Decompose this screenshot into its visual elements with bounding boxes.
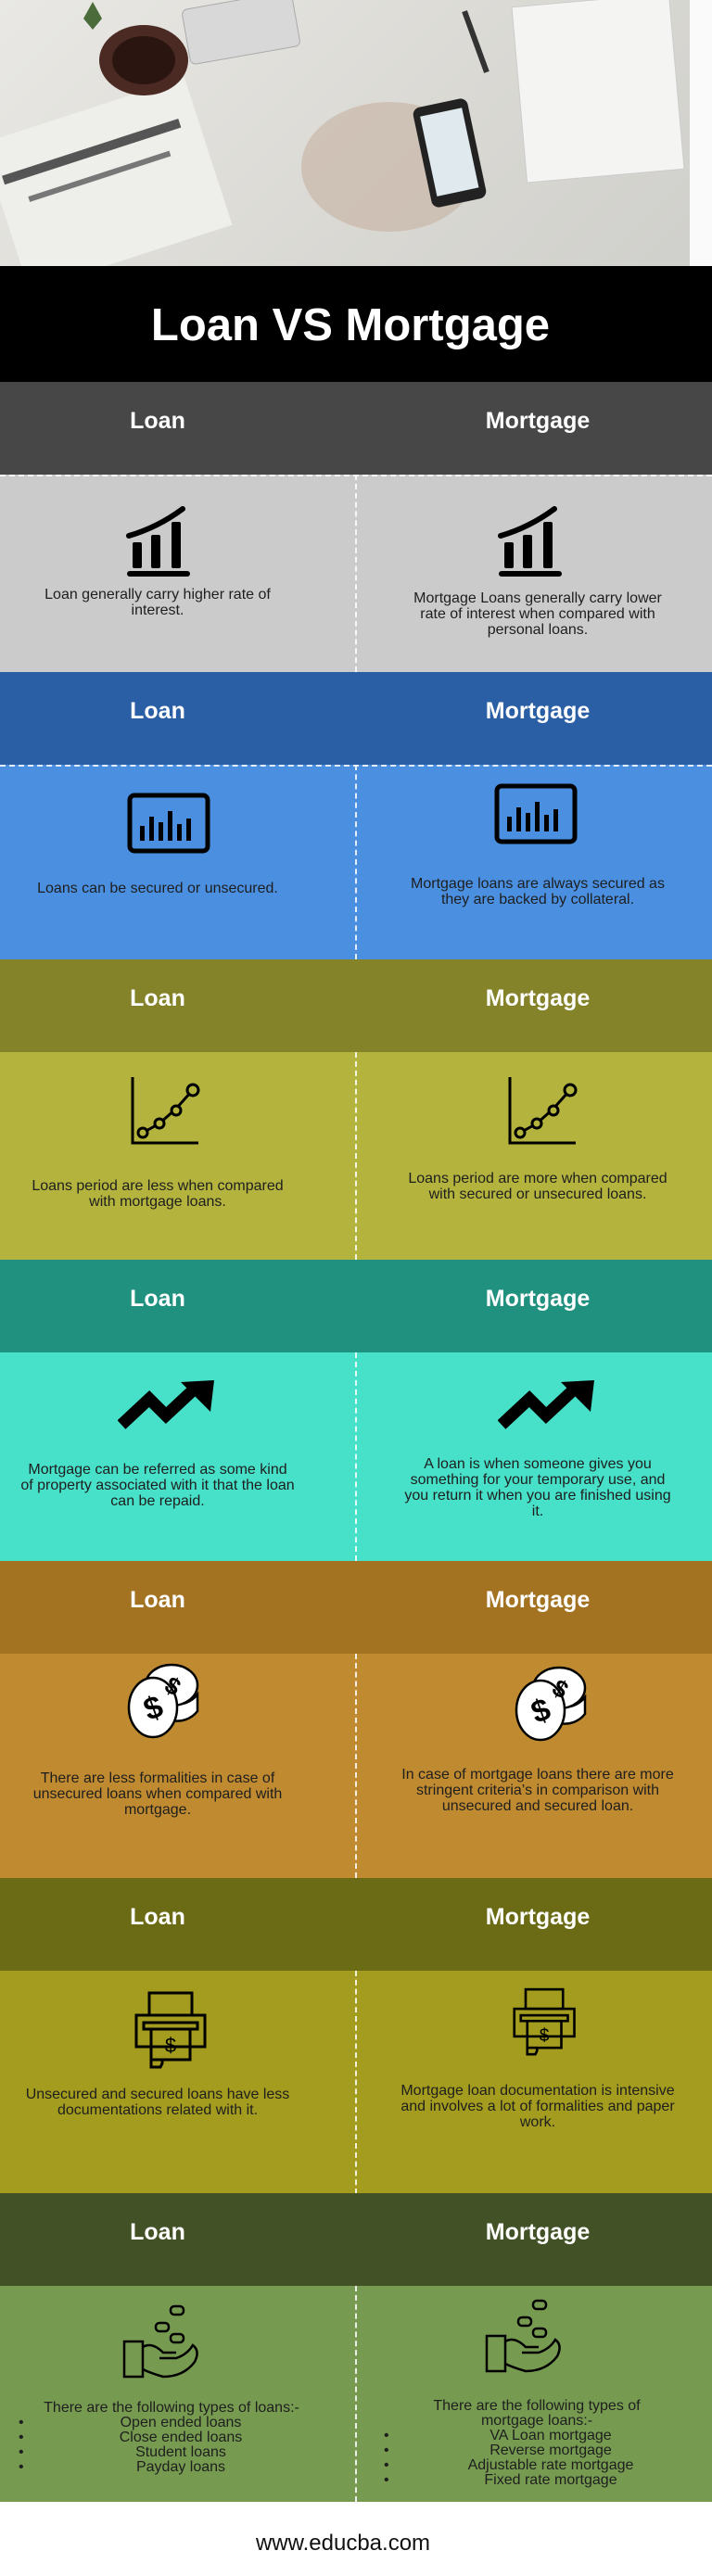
text: loan types list: Close ended loans [120,2430,242,2445]
icon: rising bar chart right [498,506,562,577]
text: loan types list: • [19,2459,24,2475]
header row 1: Loan [130,408,185,434]
text: loan security: Loans can be secured or unsecured. [37,881,278,896]
panel: row 6 documentation [0,1971,712,2194]
icon: monitor chart left [128,793,210,853]
text: mortgage types list: VA Loan mortgage [490,2428,612,2443]
icon: coins right: $ [527,1692,555,1731]
icon: coins right: $ [548,1673,574,1705]
icon: monitor chart right [495,784,577,844]
icon: hand with coins right [486,2299,561,2373]
text: mortgage types list: Fixed rate mortgage [484,2472,617,2488]
header row 5 [0,1561,712,1654]
text: mortgage interest: Mortgage Loans generally carry lower rate of interest when compared with personal loans. [413,590,662,638]
panel: row 7 types [0,2286,712,2502]
icon: line graph left [132,1077,200,1144]
text: mortgage types list: There are the following types of mortgage loans:- [433,2398,641,2429]
panel: row 2 security [0,765,712,959]
header row 2 [0,672,712,765]
header row 7: Loan [130,2219,185,2245]
icon: coins right [515,1667,586,1741]
text: mortgage security: Mortgage loans are always secured as they are backed by collateral. [411,876,665,907]
text: loan types list [19,2400,299,2475]
text: loan types list: Student loans [135,2444,226,2460]
text: loan definition: Mortgage can be referred as some kind of property associated with it that the loan can be repaid. [20,1462,295,1509]
icon: coins left [128,1663,198,1739]
header row 2: Mortgage [486,698,590,724]
photo header: desk scene [0,0,712,266]
header row 4: Mortgage [486,1286,590,1312]
text: mortgage types list: • [384,2443,389,2458]
header row 4 [0,1260,712,1352]
text: loan documentation: Unsecured and secured loans have less documentations related with it. [26,2087,289,2118]
icon: printer right [513,1987,576,2056]
header row 6 [0,1878,712,1971]
text: loan types list: Payday loans [136,2459,225,2475]
text: loan types list: • [19,2415,24,2430]
icon: printer left: $ [165,2034,176,2057]
text: mortgage types list: Reverse mortgage [490,2443,612,2458]
header row 6: Loan [130,1904,185,1930]
panel: row 1 interest rate [0,475,712,672]
text: mortgage documentation: Mortgage loan documentation is intensive and involves a lot of formalities and paper work. [400,2083,675,2130]
text: loan types list: Open ended loans [121,2415,241,2430]
header row 4: Loan [130,1286,185,1312]
header row 7: Mortgage [486,2219,590,2245]
panel: row 5 formalities [0,1654,712,1878]
text: loan period: Loans period are less when compared with mortgage loans. [32,1178,284,1210]
header row 6: Mortgage [486,1904,590,1930]
panel: row 3 period [0,1052,712,1260]
icon: coins left: $ [160,1670,186,1702]
icon: printer right: $ [540,2026,550,2046]
text: mortgage definition: A loan is when someone gives you something for your temporary use, and you return it when you are finished using it. [404,1456,671,1519]
text: loan types list: • [19,2444,24,2460]
icon: hand with coins left [122,2304,198,2379]
text: mortgage types list: • [384,2457,389,2473]
header row 1 [0,382,712,475]
header row 7 [0,2193,712,2286]
icon: line graph right [508,1077,577,1144]
icon: zigzag arrow left [118,1380,214,1429]
header row 3: Mortgage [486,985,590,1011]
text: mortgage formalities: In case of mortgage loans there are more stringent criteria’s in comparison with unsecured and secured loan. [401,1767,674,1814]
icon: printer left [135,1991,206,2069]
icon: zigzag arrow right [498,1380,594,1429]
text: mortgage period: Loans period are more when compared with secured or unsecured loans. [408,1171,668,1202]
text: loan formalities: There are less formalities in case of unsecured loans when compared with mortgage. [33,1770,282,1818]
header row 5: Mortgage [486,1587,590,1613]
header row 1: Mortgage [486,408,590,434]
title bar: Loan VS Mortgage [151,300,550,350]
header row 2: Loan [130,698,185,724]
header row 5: Loan [130,1587,185,1613]
text: loan types list: • [19,2430,24,2445]
header row 3: Loan [130,985,185,1011]
header row 3 [0,959,712,1052]
icon: rising bar chart left [126,506,190,577]
text: mortgage types list: • [384,2472,389,2488]
icon: coins left: $ [139,1689,168,1728]
panel: row 4 definition [0,1352,712,1561]
text: mortgage types list [384,2398,641,2488]
text: loan interest: Loan generally carry higher rate of interest. [44,587,271,618]
text: mortgage types list: Adjustable rate mortgage [468,2457,633,2473]
text: loan types list: There are the following types of loans:- [44,2400,299,2416]
footer: website: www.educba.com [256,2531,430,2556]
text: mortgage types list: • [384,2428,389,2443]
title bar [0,266,712,383]
